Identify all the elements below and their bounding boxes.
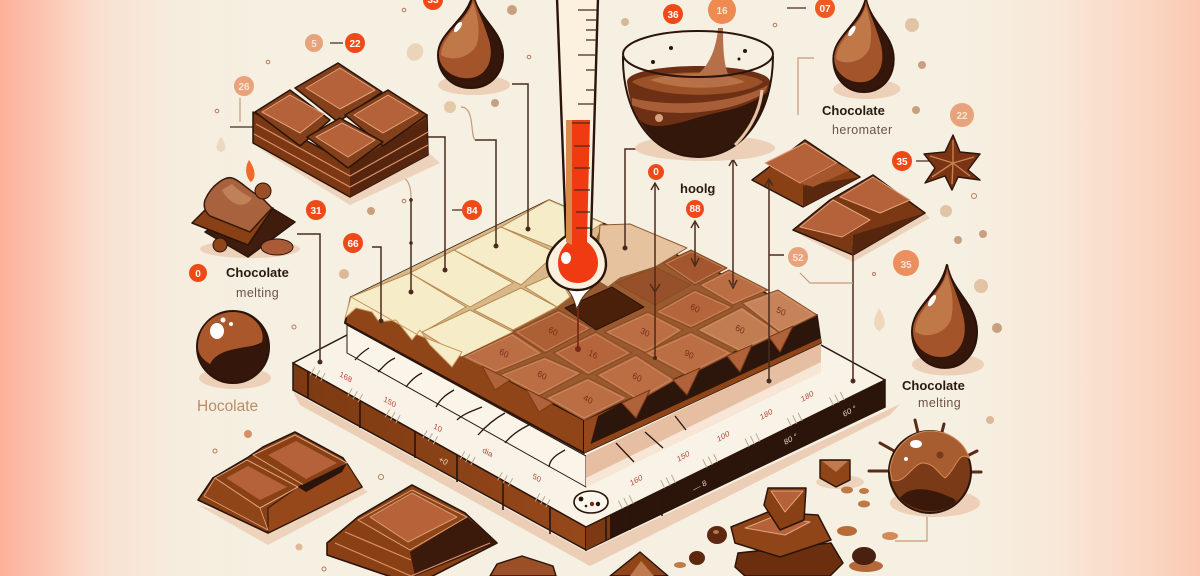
label: chocolate heromater: Chocolate (822, 103, 885, 118)
ruler labels right: 180 (759, 407, 774, 422)
ruler labels right (629, 389, 815, 488)
badge numbers: 26 (238, 82, 250, 93)
stack tiles (255, 63, 427, 168)
cream grout (351, 200, 603, 357)
cream drips (345, 297, 462, 367)
badge numbers: 35 (900, 260, 912, 271)
chocolate truffle (869, 420, 981, 517)
badges (189, 0, 974, 282)
panel: melted chunk (192, 160, 300, 258)
chocolate fill (627, 66, 770, 157)
cream droplets and dots (213, 5, 1002, 571)
label: chocolate heromater (822, 103, 893, 137)
tile markings: 90 (683, 347, 695, 361)
small piece bottom (490, 556, 556, 576)
badge numbers: 84 (466, 206, 478, 217)
drop: top left (438, 0, 510, 95)
cream layer left (347, 325, 586, 487)
label: chocolate melting right (902, 378, 965, 410)
badge numbers: 31 (310, 206, 322, 217)
label: hocolate: Hocolate (197, 398, 258, 415)
badge numbers: 5 (311, 39, 317, 50)
scale ticks (572, 10, 597, 228)
drop: lower right (912, 264, 984, 376)
label: chocolate melting right: melting (918, 396, 961, 410)
bowl shadow (635, 135, 775, 161)
arrowheads (650, 159, 773, 292)
ruler ticks right (620, 385, 865, 505)
tile markings: 60 (547, 324, 559, 338)
ruler labels left: 10 (432, 422, 444, 435)
panel: right chocolate pieces (752, 140, 930, 262)
ruler labels right: 160 (629, 473, 644, 488)
panel: ruler platform (293, 335, 900, 566)
badge numbers: 07 (819, 4, 831, 15)
piece lower (793, 175, 925, 255)
melted cream sheet (596, 224, 687, 287)
badge numbers: 22 (349, 39, 361, 50)
bar top base (351, 200, 817, 420)
tile markings: 60 (536, 368, 548, 382)
label: chocolate melting left: melting (236, 286, 279, 300)
pouring stream (688, 28, 732, 86)
badge numbers: 35 (896, 157, 908, 168)
badge numbers: 0 (195, 269, 201, 280)
badge numbers: 36 (667, 10, 679, 21)
label: chocolate melting left (226, 265, 289, 300)
badge group red (189, 0, 912, 282)
bar right face (584, 315, 821, 453)
ruler labels right: 180 (800, 389, 815, 404)
tile markings: 30 (639, 325, 651, 339)
platform top (293, 335, 885, 527)
ruler labels right: 100 (716, 429, 731, 444)
ruler labels left: 50 (531, 472, 543, 485)
side scale labels: +0 (437, 455, 450, 467)
mercury (558, 120, 598, 283)
chocolate nuts (255, 183, 271, 199)
side scale labels: — 8 (692, 478, 708, 494)
panel: chocolate bar (345, 200, 821, 487)
chocolate chips (674, 486, 898, 572)
layer dividers (355, 348, 686, 467)
stack body (253, 112, 428, 197)
ruler labels right: 150 (676, 449, 691, 464)
panel: glass bowl (623, 28, 775, 161)
dark melted tile (565, 287, 644, 330)
badge numbers: 52 (792, 253, 804, 264)
badge group tan (234, 0, 974, 276)
badge numbers: 22 (956, 111, 968, 122)
platform shadow (293, 392, 900, 566)
platform right side (586, 380, 885, 550)
badge numbers: 66 (347, 239, 359, 250)
ruler labels left: 150 (382, 395, 398, 410)
lower slab (205, 207, 295, 257)
side scale labels (437, 403, 857, 494)
melt tail (566, 288, 592, 310)
dial icon (574, 491, 608, 513)
ruler labels left (338, 370, 543, 485)
glass rim (623, 31, 773, 77)
triangle piece bottom (610, 552, 668, 576)
side scale labels: 60 ° (842, 403, 857, 419)
tiles chocolate (462, 250, 817, 420)
tube and bulb (547, 0, 606, 290)
badge numbers: 88 (689, 204, 701, 215)
platform left side (293, 363, 586, 550)
label: chocolate melting right: Chocolate (902, 378, 965, 393)
label: chocolate heromater: heromater (832, 123, 893, 137)
tile markings: 60 (631, 370, 643, 384)
line end dots (318, 198, 856, 384)
chocolate ball (197, 311, 271, 389)
label: chocolate melting left: Chocolate (226, 265, 289, 280)
tile markings (498, 301, 787, 406)
ruler labels left: 168 (338, 370, 354, 385)
panel: chocolate pile (731, 488, 843, 576)
tile inner highlights (466, 252, 813, 418)
small chocolate cube (816, 460, 864, 489)
panel: chocolate bottom centre (327, 485, 497, 576)
panel: stacked chocolate (253, 63, 440, 205)
panel: chocolate bottom left (198, 432, 368, 545)
cream layer right (586, 343, 821, 487)
tile markings: 40 (582, 392, 594, 406)
melted top (204, 178, 272, 232)
thermometer (547, 0, 606, 352)
tile markings: 60 (498, 346, 510, 360)
panel: leader lines (230, 8, 930, 541)
ruler labels left: dia (481, 446, 494, 459)
tile markings: 50 (775, 304, 787, 318)
tile markings: 60 (689, 301, 701, 315)
piece upper (752, 140, 860, 207)
flame (246, 160, 255, 182)
tile markings: 60 (734, 322, 746, 336)
bar left face (345, 297, 584, 453)
star anise (924, 135, 980, 190)
badge numbers (195, 0, 968, 280)
label: hoolg: hoolg (680, 181, 715, 196)
tiles cream (351, 200, 603, 357)
badge numbers: 0 (653, 167, 659, 178)
chocolate drips (482, 326, 793, 418)
badge numbers: 16 (716, 6, 728, 17)
drop: top right (833, 0, 900, 99)
tile markings: 16 (587, 347, 599, 361)
side scale labels: 80 ° (783, 431, 798, 447)
ruler ticks left (312, 371, 560, 510)
